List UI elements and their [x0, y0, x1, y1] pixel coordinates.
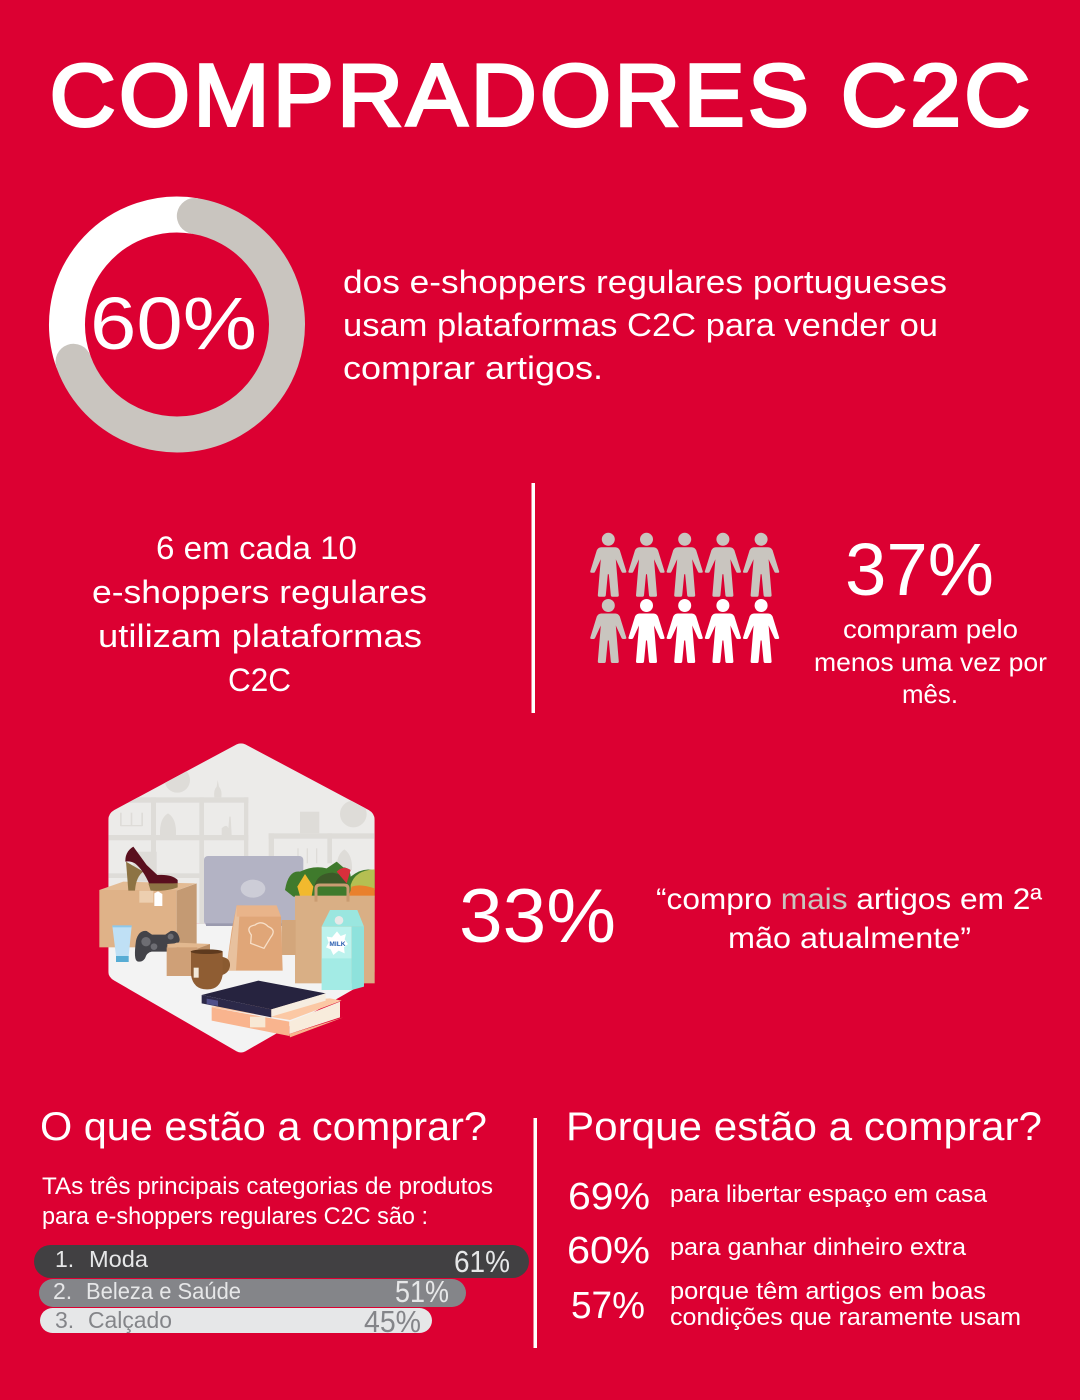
- reason: 57%: condições que raramente usam: [670, 1304, 1021, 1331]
- books: [202, 981, 343, 1037]
- bar: Moda: [34, 1244, 529, 1279]
- reason: 60%: [567, 1230, 967, 1272]
- stat: 37% monthly buyers: menos uma vez por: [814, 647, 1047, 677]
- quote: “compro mais artigos em 2ª: [656, 883, 1043, 916]
- hexagon background: [100, 737, 383, 1057]
- reason: 69%: [568, 1176, 988, 1218]
- reason: 57%: 57%: [571, 1285, 645, 1327]
- reason: 57%: [571, 1278, 1021, 1331]
- milk carton: MILK: [329, 941, 346, 948]
- reason: 69%: para libertar espaço em casa: [670, 1181, 988, 1208]
- bar: Calçado: [40, 1304, 432, 1339]
- reason: 57%: porque têm artigos em boas: [670, 1278, 986, 1305]
- text block: categories intro: TAs três principais categorias de produtos: [42, 1173, 493, 1200]
- illustration: hexagon with second-hand goods: [99, 737, 383, 1057]
- stat: 37% monthly buyers: mês.: [902, 679, 958, 709]
- text block: e-shoppers intro: [343, 264, 947, 386]
- bar: Calçado: Calçado: [88, 1307, 172, 1333]
- reason: 60%: 60%: [567, 1230, 650, 1272]
- text block: e-shoppers intro: comprar artigos.: [343, 350, 603, 386]
- stat: 37% monthly buyers: [814, 528, 1047, 709]
- grocery bag: [282, 862, 375, 983]
- stat: 33%: 33%: [459, 874, 616, 959]
- bar: Beleza e Saúde: [39, 1274, 466, 1309]
- stat: 37% monthly buyers: compram pelo: [843, 614, 1018, 644]
- mug: [191, 949, 230, 989]
- paper bag: [226, 905, 283, 971]
- donut chart: 60%: [67, 215, 287, 435]
- title: COMPRADORES C2C: [50, 46, 1034, 144]
- bar: Beleza e Saúde: Beleza e Saúde: [86, 1278, 241, 1304]
- heading: what: O que estão a comprar?: [40, 1105, 487, 1149]
- text block: 6 em cada 10: 6 em cada 10: [156, 530, 357, 566]
- text block: 6 em cada 10: C2C: [228, 662, 291, 698]
- stat: 37% monthly buyers: 37%: [845, 528, 994, 611]
- quote: mão atualmente”: [728, 922, 971, 955]
- text block: categories intro: [42, 1173, 493, 1230]
- reason: 69%: 69%: [568, 1176, 650, 1218]
- milk carton: [322, 910, 364, 990]
- text block: 6 em cada 10: [92, 530, 427, 698]
- bar: Moda: 61%: [454, 1244, 510, 1279]
- text block: categories intro: para e-shoppers regulares C2C são :: [42, 1203, 428, 1230]
- text block: 6 em cada 10: e-shoppers regulares: [92, 574, 427, 610]
- bar: Beleza e Saúde: 51%: [395, 1274, 449, 1309]
- bar: Beleza e Saúde: 2.: [53, 1278, 72, 1304]
- divider: [534, 1118, 537, 1348]
- icon: pictogram of ten people: [590, 533, 779, 663]
- bar: Moda: Moda: [89, 1246, 148, 1272]
- bar: Calçado: 3.: [55, 1307, 74, 1333]
- divider: [532, 483, 535, 713]
- heading: why: Porque estão a comprar?: [566, 1105, 1042, 1149]
- small box: [167, 943, 210, 976]
- donut chart: 60%: 60%: [90, 282, 257, 365]
- laptop: [204, 856, 303, 926]
- quote: [656, 883, 1043, 955]
- cosmetic tube: [112, 925, 132, 962]
- text block: 6 em cada 10: utilizam plataformas: [98, 618, 422, 654]
- text block: e-shoppers intro: dos e-shoppers regulares portugueses: [343, 264, 947, 300]
- reason: 60%: para ganhar dinheiro extra: [670, 1234, 967, 1261]
- text block: e-shoppers intro: usam plataformas C2C para vender ou: [343, 307, 938, 343]
- game controller: [135, 931, 180, 962]
- box with shoe: [99, 847, 197, 952]
- bar: Moda: 1.: [55, 1246, 74, 1272]
- bar: Calçado: 45%: [364, 1304, 421, 1339]
